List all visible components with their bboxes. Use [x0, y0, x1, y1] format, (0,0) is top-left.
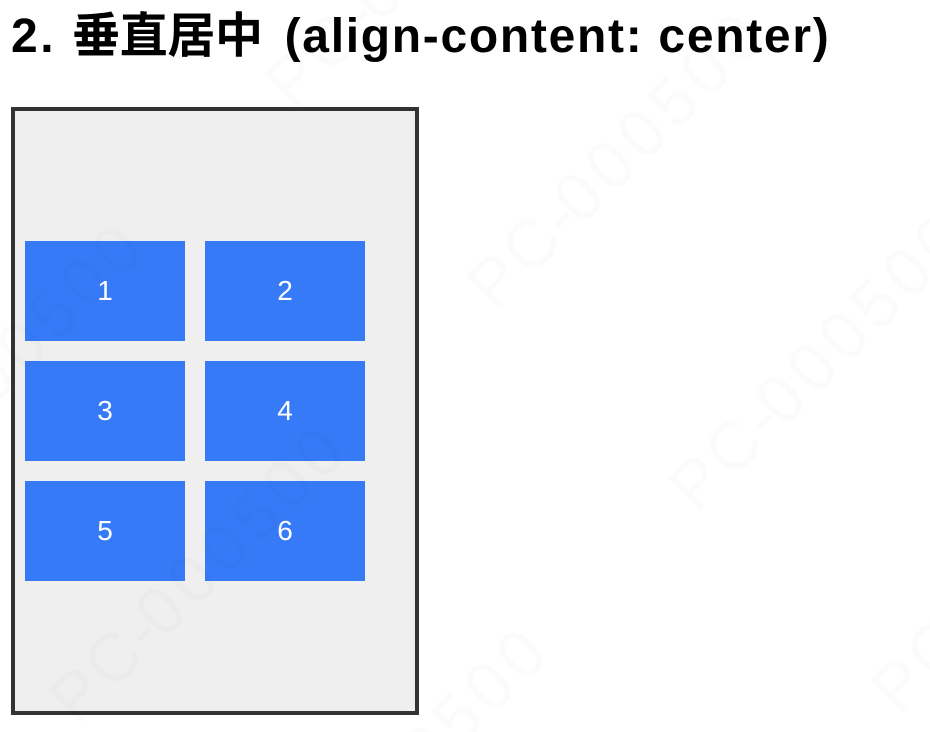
title: 2. 垂直居中 (align-content: center) — [11, 10, 830, 63]
item 5: 5 — [97, 515, 113, 546]
item 3: 3 — [97, 395, 113, 426]
item 5 — [25, 481, 185, 581]
item 2: 2 — [277, 275, 293, 306]
item 6 — [205, 481, 365, 581]
item 1: 1 — [97, 275, 113, 306]
item 6: 6 — [277, 515, 293, 546]
item 2 — [205, 241, 365, 341]
item 4: 4 — [277, 395, 293, 426]
item 1 — [25, 241, 185, 341]
panel: flex container — [11, 107, 419, 715]
watermark: PC-000500 — [452, 0, 782, 324]
item 4 — [205, 361, 365, 461]
watermark: PC-000500 — [34, 407, 364, 732]
item 3 — [25, 361, 185, 461]
